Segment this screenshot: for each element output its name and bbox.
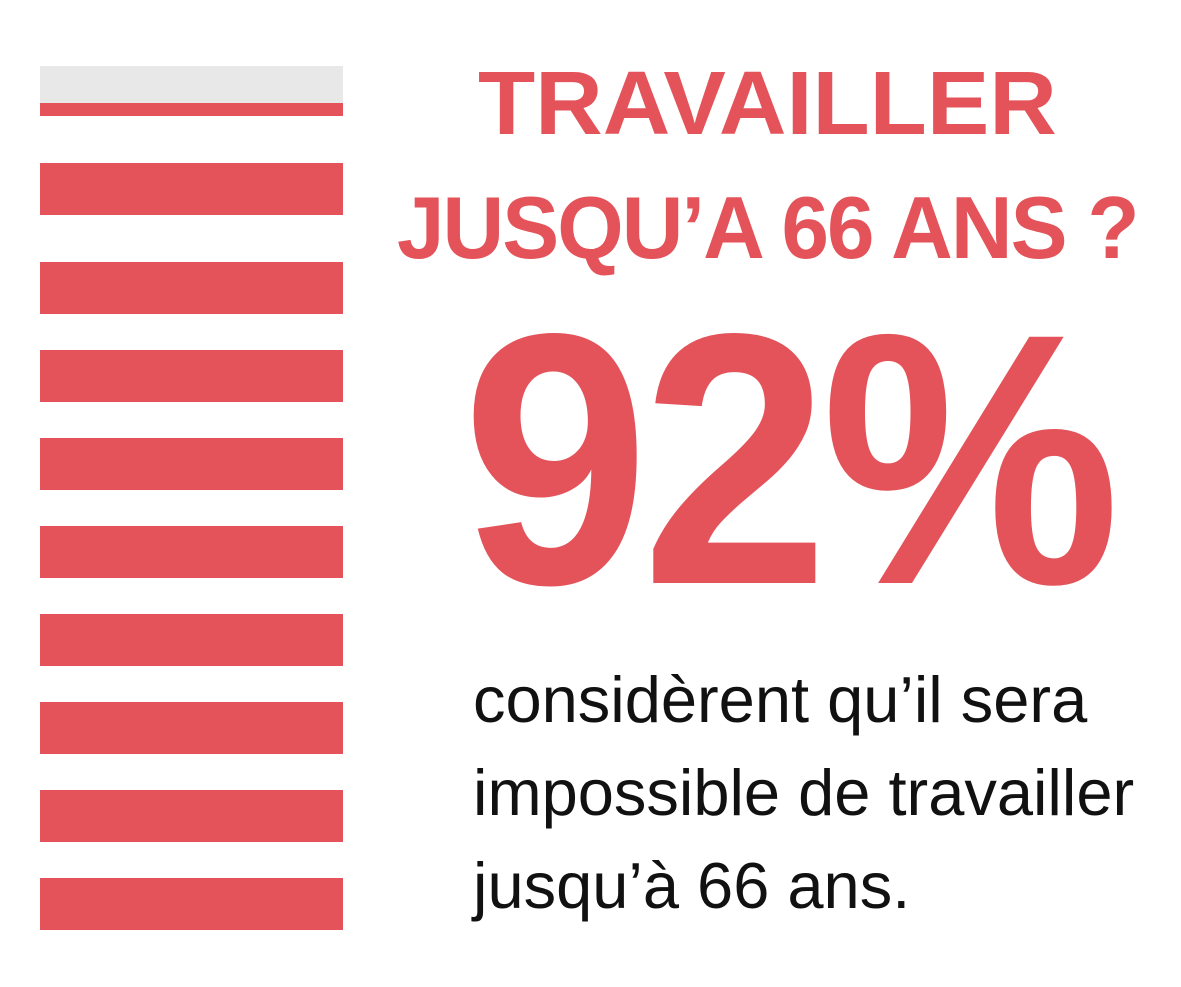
big percentage: 92% (462, 259, 1113, 659)
body text: impossible de travailler (473, 756, 1134, 829)
bar chart: stacked stripes (40, 66, 343, 930)
body text: considèrent qu’il sera (473, 663, 1087, 736)
bar: gray partial top (40, 66, 343, 103)
body text: jusqu’à 66 ans. (473, 849, 910, 922)
title line 1: TRAVAILLER (478, 54, 1057, 154)
title line 2: JUSQU’A 66 ANS ? (397, 178, 1138, 277)
body text (471, 663, 1134, 922)
